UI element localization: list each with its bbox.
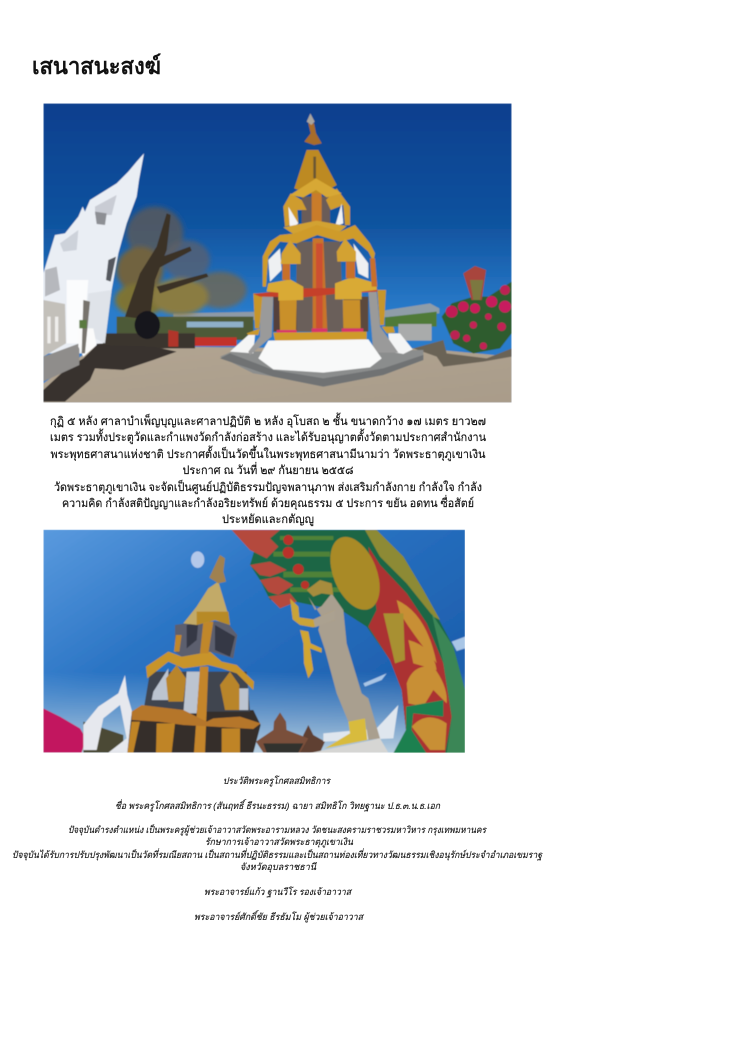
- sky: [43, 530, 465, 753]
- abbot biography: [12, 775, 543, 923]
- paragraph: temple description: ประกาศ ณ วันที่ ๒๙ กันยายน ๒๕๕๘: [182, 462, 354, 477]
- white niches: [268, 243, 368, 282]
- far pilasters: [253, 290, 386, 328]
- necklace and lower hand: [300, 630, 322, 678]
- paragraph: temple description: พระพุทธศาสนาแห่งชาติ ประกาศตั้งเป็นวัดขึ้นในพระพุทธศาสนามีนามว่า วัดพระธาตุภูเขาเงิน: [50, 445, 486, 462]
- current position: ปัจจุบันดำรงตำแหน่ง เป็นพระครูผู้ช่วยเจ้าอาวาสวัดพระอารามหลวง วัดชนะสงครามราชวรมหาวิหาร กรุงเทพมหานคร: [68, 824, 487, 836]
- gold lower caps: [267, 277, 377, 301]
- platform: [220, 350, 424, 379]
- flowers: [43, 708, 86, 753]
- white wings: [230, 333, 413, 354]
- naga arch and Buddha statue: [232, 530, 465, 753]
- lens flare: [191, 551, 204, 568]
- golden pagoda: [220, 113, 423, 387]
- paragraph: temple description: ความคิด กำลังสติปัญญาและกำลังอริยะทรัพย์ ด้วยคุณธรรม ๕ ประการ ขยัน อดทน ซื่อสัตย์: [62, 495, 474, 510]
- bougainvillea and naga statue: [413, 266, 512, 367]
- hill: [83, 722, 123, 753]
- white arch: [83, 675, 135, 753]
- red fence: [195, 337, 237, 346]
- assistant abbot: พระอาจารย์ศักดิ์ชัย ธีรธัมโม ผู้ช่วยเจ้าอาวาส: [194, 910, 364, 923]
- gold halo disc: [321, 530, 389, 617]
- ground shadow: [43, 345, 177, 402]
- paragraph: temple description: วัดพระธาตุภูเขาเงิน จะจัดเป็นศูนย์ปฏิบัติธรรมปัญจพลานุภาพ ส่งเสริมกำลังกาย กำลังใจ กำลัง: [54, 479, 482, 495]
- deputy abbot: พระอาจารย์แก้ว ฐานวีโร รองเจ้าอาวาส: [204, 886, 352, 898]
- paragraph: temple description: กุฏิ ๕ หลัง ศาลาบำเพ็ญบุญและศาลาปฏิบัติ ๒ หลัง อุโบสถ ๒ ชั้น ขนาดกว้าง ๑๗ เมตร ยาว๒๗: [50, 412, 486, 428]
- small stupas: [256, 712, 325, 753]
- ground: [43, 345, 512, 403]
- paragraph: temple description: [50, 412, 486, 527]
- right background roof and building: [383, 303, 439, 317]
- red cross band: [253, 288, 377, 297]
- gong: [135, 311, 160, 339]
- paragraph: temple description: เมตร รวมทั้งประตูวัดและกำแพงวัดกำลังก่อสร้าง และได้รับอนุญาตตั้งวัดตามประกาศสำนักงาน: [50, 428, 486, 445]
- paragraph: temple description: ประหยัดและกตัญญู: [222, 513, 314, 527]
- statue hair: [307, 580, 333, 597]
- outer green scales: [432, 613, 465, 753]
- current position: [12, 824, 543, 873]
- clouds: [363, 637, 465, 687]
- pagoda: [127, 555, 261, 753]
- gold crown arches: [263, 222, 375, 287]
- pink base trim: [277, 328, 363, 333]
- title: เสนาสนะสงฆ์: [32, 53, 161, 79]
- current position: รักษาการเจ้าอาวาสวัดพระธาตุภูเขาเงิน: [205, 836, 354, 848]
- biography heading: ประวัติพระครูโกศลสมิทธิการ: [223, 775, 331, 787]
- photo: naga Buddha statue and pagoda: [43, 530, 465, 753]
- red scroll band: [368, 547, 452, 753]
- sky: [43, 103, 512, 403]
- spire: [304, 123, 322, 145]
- distant white structure: [323, 705, 398, 742]
- red hood tips: [232, 530, 297, 608]
- golden feet: [325, 718, 367, 748]
- lower gold pillars: [279, 300, 361, 330]
- statue body: [308, 593, 380, 740]
- white temple: [43, 153, 144, 382]
- centre column: [313, 238, 327, 330]
- photo: golden pagoda with temple and tree: [43, 103, 512, 403]
- current position: จังหวัดอุบลราชธานี: [240, 861, 317, 873]
- statue arm and hand: [290, 598, 335, 627]
- background trees and roof: [173, 312, 258, 320]
- olive outer scales: [365, 530, 440, 620]
- hood: [232, 530, 465, 753]
- tree: [115, 207, 247, 320]
- stone base: [308, 738, 388, 753]
- side walls: [248, 292, 398, 355]
- white base: [258, 339, 382, 373]
- dome: [294, 150, 337, 193]
- current position: ปัจจุบันได้รับการปรับปรุงพัฒนาเป็นวัดที่รมณียสถาน เป็นสถานที่ปฏิบัติธรรมและเป็นสถานท่องเที่ยวทางวัฒนธรรมเชิงอนุรักษ์ประจำอำเภอเขมราฐ: [12, 848, 543, 861]
- upper tier: [302, 197, 330, 223]
- body: [296, 242, 344, 332]
- name and credentials: ชื่อ พระครูโกศลสมิทธิการ (สันฤทธิ์ ธีรนะธรรม) ฉายา สมิทธิโก วิทยฐานะ ป.ธ.๓.น.ธ.เอก: [115, 799, 441, 812]
- gold base band: [273, 332, 367, 341]
